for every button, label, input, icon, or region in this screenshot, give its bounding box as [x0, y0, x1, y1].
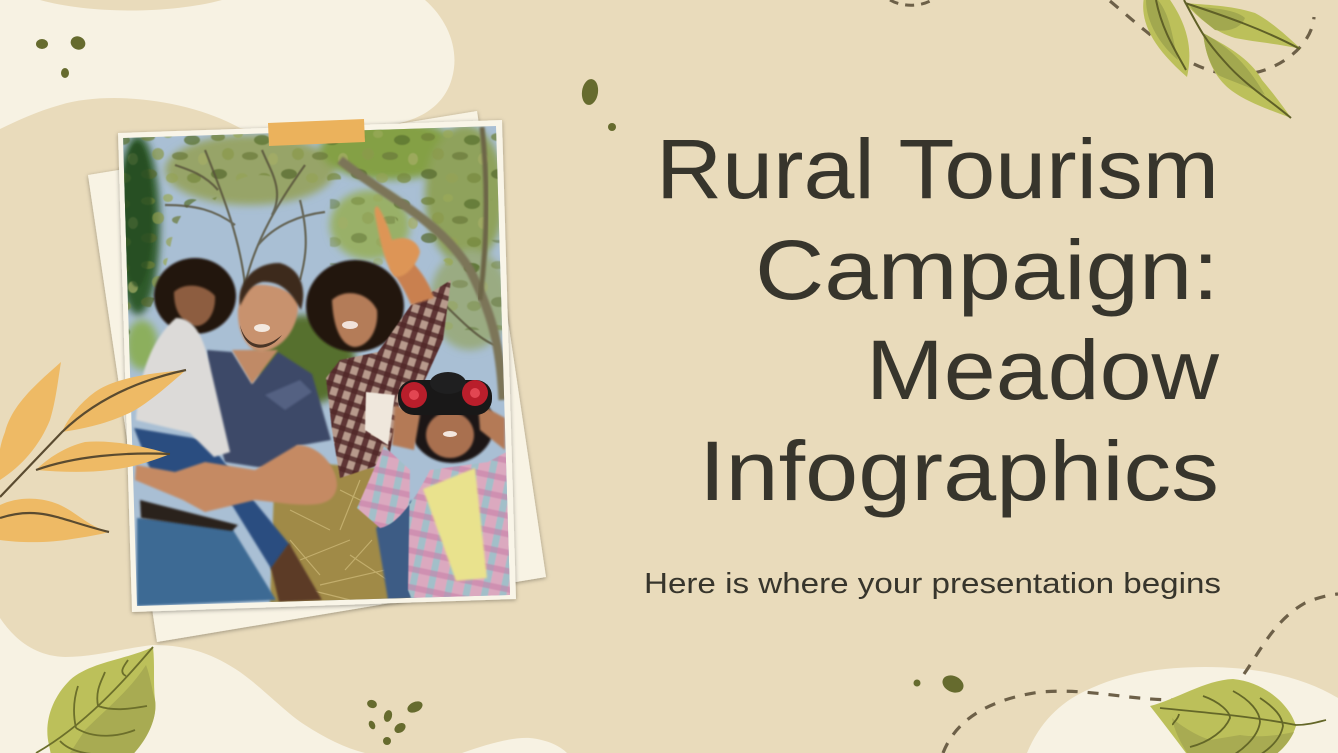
girl hair [414, 406, 492, 465]
decorative dots: bottom centre [366, 699, 424, 745]
child face [174, 286, 215, 326]
girl tank top [423, 468, 487, 581]
woman hair [306, 260, 404, 352]
background blob: top strip [40, 0, 222, 10]
man neck [232, 350, 278, 384]
man shirt [207, 350, 331, 472]
girl hands [392, 403, 505, 450]
background blob: bottom left [0, 618, 365, 753]
back paper [88, 111, 546, 642]
child boot [271, 543, 322, 602]
branches [165, 150, 495, 345]
woman shirt [326, 280, 451, 478]
man head [238, 285, 298, 352]
foliage texture [123, 126, 505, 340]
decorative dots: top centre [580, 78, 616, 131]
woman jeans [376, 500, 416, 600]
tape [268, 119, 365, 146]
child hair [154, 258, 236, 334]
subtitle: Here is where your presentation begins [644, 568, 1221, 600]
photo: family in the countryside [115, 120, 515, 610]
icon: green leaf bottom right [1150, 679, 1326, 753]
trees [116, 120, 510, 405]
icon: green leaves top right [1143, 0, 1301, 118]
man belt [140, 500, 238, 531]
title: Infographics [699, 424, 1219, 518]
dark tree at left [122, 143, 152, 287]
title [656, 122, 1219, 518]
dashed path: top [890, 0, 932, 5]
title: Campaign: [755, 223, 1219, 317]
icon: green leaf bottom left [36, 647, 155, 753]
woman arm and hand [390, 262, 434, 305]
decorative dots: top left [36, 34, 88, 78]
background blob: top left [0, 0, 454, 131]
photo frame [115, 120, 516, 612]
dashed path: bottom right curve [943, 691, 1178, 753]
large trunk [340, 160, 503, 400]
man jeans [137, 518, 276, 606]
title: Meadow [866, 323, 1219, 417]
dashed path: right curve [1244, 594, 1338, 674]
dashed path: top right [1110, 1, 1314, 74]
man arm and hands [135, 445, 337, 512]
child jeans [134, 428, 290, 570]
background blob: bottom centre [462, 738, 567, 753]
binoculars [398, 380, 492, 415]
woman face [332, 293, 377, 347]
decorative dots: bottom right [914, 672, 966, 696]
icon: orange branch [0, 362, 186, 542]
title: Rural Tourism [656, 122, 1219, 216]
child shirt [136, 318, 230, 457]
girl face [426, 412, 474, 458]
background blob: bottom right [1027, 667, 1338, 753]
hay [270, 460, 410, 604]
girl shirt [357, 446, 512, 600]
